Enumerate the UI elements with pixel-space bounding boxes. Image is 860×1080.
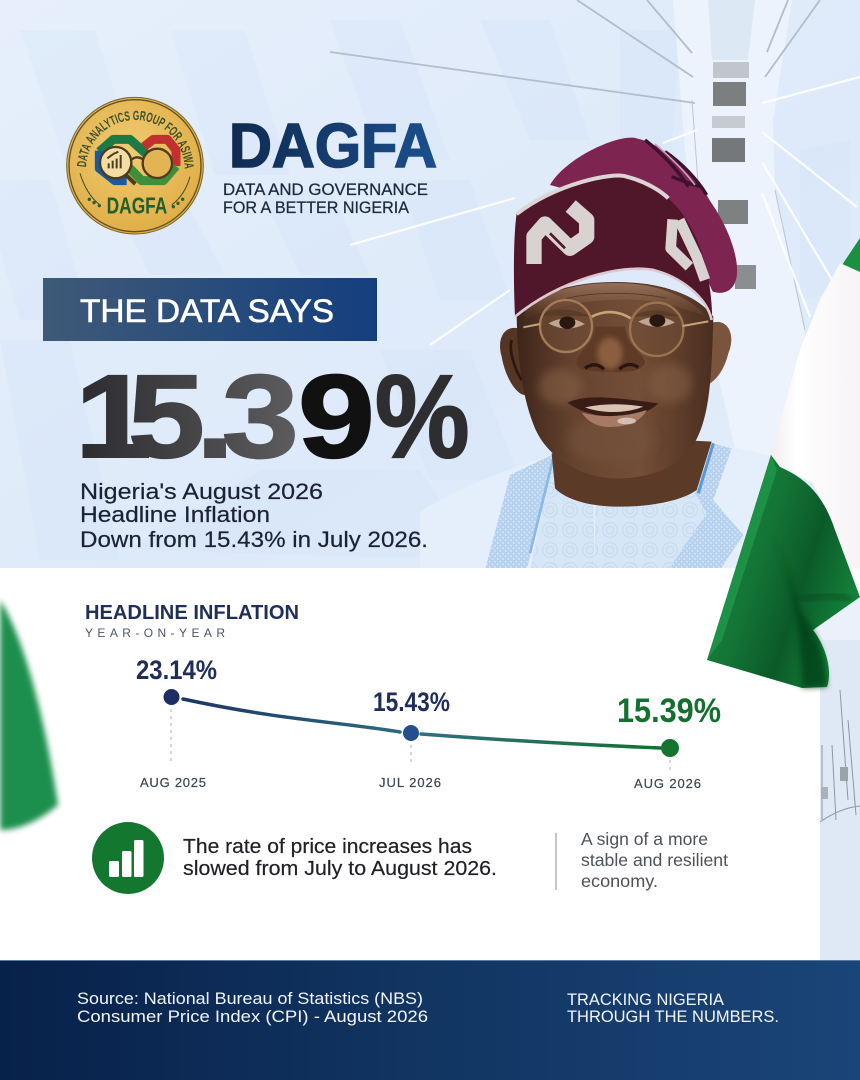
point: Aug 2025: AUG 2025 — [140, 775, 206, 790]
footer — [0, 960, 860, 1080]
chart title: HEADLINE INFLATION — [85, 602, 299, 624]
subheading text: Down from 15.43% in July 2026. — [80, 527, 428, 552]
callout: stable economy — [581, 829, 728, 891]
logo: DAGFA gold badge — [66, 96, 204, 234]
callout: price increases: The rate of price increases has — [183, 836, 472, 858]
portrait — [420, 138, 775, 570]
headline figure: 9 — [298, 351, 375, 483]
tagline: TRACKING NIGERIA — [567, 990, 725, 1009]
logo ring text: DATA ANALYTICS GROUP FOR ASIWAJU — [76, 110, 194, 169]
point: Jul 2026: 15.43% — [373, 687, 450, 717]
banner: the data says: THE DATA SAYS — [80, 293, 334, 329]
point: Aug 2026 — [617, 692, 721, 791]
icon: bar chart circle — [92, 822, 164, 894]
subheading text — [80, 479, 428, 552]
flag: green band — [707, 455, 860, 688]
hat — [514, 138, 737, 322]
chart title — [85, 602, 299, 640]
chart trend line — [183, 699, 660, 748]
logo mini chart — [107, 152, 121, 168]
tagline: THROUGH THE NUMBERS. — [567, 1007, 779, 1026]
background — [0, 0, 860, 570]
source text: Source: National Bureau of Statistics (NBS) — [77, 989, 423, 1008]
callout: price increases — [183, 836, 497, 880]
point: Aug 2026: AUG 2026 — [634, 776, 701, 791]
tagline — [567, 990, 779, 1026]
point: Jul 2026 — [373, 687, 450, 790]
chart drop lines — [171, 709, 670, 770]
brand name: DAGFA — [229, 112, 437, 181]
logo wordmark: DAGFA — [107, 192, 167, 218]
headline figure: 15.3 — [75, 351, 299, 483]
mouth — [567, 397, 658, 427]
glasses — [523, 300, 708, 356]
headline figure — [75, 350, 469, 483]
left flag — [0, 600, 58, 830]
point: Aug 2025: 23.14% — [136, 655, 217, 685]
cheeks and nose — [536, 326, 694, 444]
panel: chart background — [0, 568, 860, 960]
flag: white band — [770, 238, 860, 600]
source text: Consumer Price Index (CPI) - August 2026 — [77, 1007, 428, 1026]
source text — [77, 989, 428, 1026]
headline figure: % — [375, 350, 469, 482]
subheading text: Headline Inflation — [80, 502, 270, 527]
logo infinity symbol — [99, 139, 176, 184]
brand name: DATA AND GOVERNANCE — [223, 181, 428, 199]
banner: the data says — [43, 278, 377, 341]
callout: stable economy: economy. — [581, 871, 658, 891]
callout: stable economy: A sign of a more — [581, 829, 708, 849]
bridge tower — [330, 0, 860, 470]
callout: stable economy: stable and resilient — [581, 850, 728, 870]
callout: price increases: slowed from July to August 2026. — [183, 858, 497, 880]
point: Aug 2026: 15.39% — [617, 692, 721, 730]
point: Jul 2026: JUL 2026 — [379, 775, 441, 790]
point: Aug 2025 — [136, 655, 217, 790]
chart title: YEAR-ON-YEAR — [85, 626, 225, 640]
brand name: FOR A BETTER NIGERIA — [223, 199, 409, 217]
line chart — [136, 655, 721, 791]
right bridge strip — [813, 597, 860, 960]
brand name — [223, 112, 437, 217]
face — [517, 282, 713, 478]
ears — [500, 322, 731, 395]
robe — [420, 443, 775, 570]
neck — [552, 440, 712, 507]
subheading text: Nigeria's August 2026 — [80, 479, 323, 504]
